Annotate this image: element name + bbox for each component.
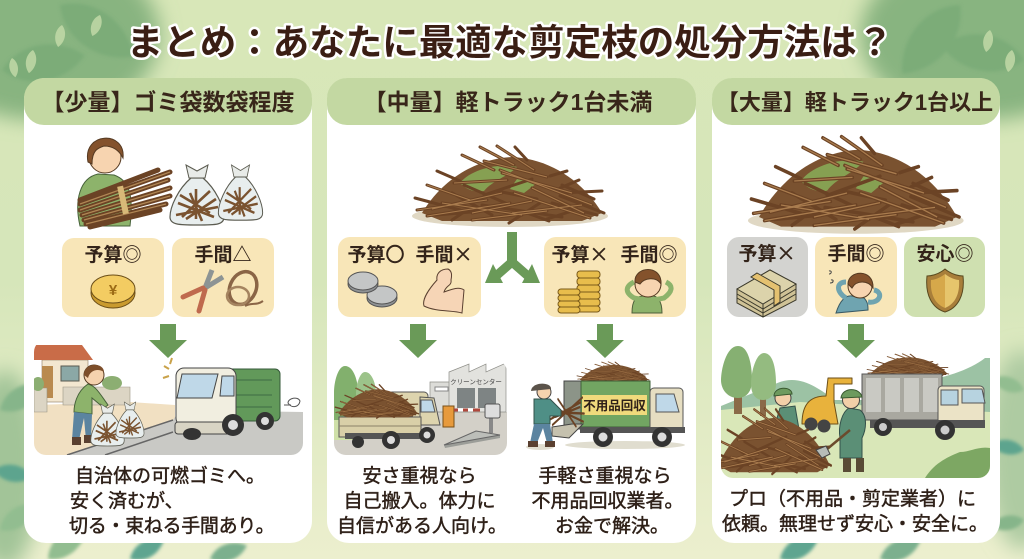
arrow down — [837, 324, 875, 358]
arrow down right — [586, 324, 624, 358]
sign: junk collection — [582, 395, 647, 415]
option: budget high, effort low: 手間◎ — [620, 244, 678, 266]
panel heading: medium amount — [327, 78, 696, 125]
arrow down left — [399, 324, 437, 358]
body text — [69, 465, 274, 537]
panel heading: medium amount: 【中量】軽トラック1台未満 — [364, 89, 652, 115]
body text right — [531, 465, 684, 537]
effort badge — [815, 237, 897, 317]
cost badge — [727, 237, 808, 317]
icon: silver coins — [348, 272, 397, 307]
title: まとめ：あなたに最適な剪定枝の処分方法は？ — [127, 22, 893, 63]
body text right: 手軽さ重視なら — [538, 465, 672, 487]
body text: 切る・束ねる手間あり。 — [69, 515, 274, 537]
body text: 自治体の可燃ゴミへ。 — [75, 465, 265, 487]
icon: relaxed person — [829, 271, 880, 313]
illustration: professional service scene — [714, 345, 990, 478]
body text left: 自信がある人向け。 — [337, 515, 507, 537]
illustration: large branch pile — [748, 137, 964, 234]
body text — [722, 488, 988, 535]
illustration: junk collection truck — [526, 362, 685, 450]
option: budget high, effort low: 予算× — [551, 240, 609, 267]
cost badge — [62, 238, 164, 317]
illustration: self haul to clean center — [334, 363, 507, 455]
illustration: branch pile — [412, 146, 608, 227]
sign: junk collection: 不用品回収 — [583, 399, 646, 413]
body text left: 安さ重視なら — [362, 465, 477, 487]
panel heading: large amount — [712, 78, 1000, 125]
panel heading: small amount — [24, 78, 312, 125]
effort badge — [172, 238, 274, 317]
illustration: self haul to clean center: クリーンセンター — [450, 377, 502, 386]
icon: banknote bundle — [737, 270, 796, 317]
body text: 安く済むが、 — [70, 490, 184, 512]
illustration: garbage collection scene — [32, 345, 303, 455]
body text: プロ（不用品・剪定業者）に — [729, 488, 976, 510]
split arrow — [485, 232, 540, 283]
icon: flexed arm — [424, 269, 464, 313]
body text right: お金で解決。 — [555, 515, 669, 537]
panel: small amount — [24, 78, 312, 543]
panel: medium amount — [327, 78, 696, 543]
panel: large amount — [712, 78, 1000, 543]
illustration: person with branches and bags — [78, 138, 263, 227]
cost badge: 予算× — [738, 239, 796, 266]
body text: 依頼。無理せず安心・安全に。 — [722, 513, 988, 535]
icon: relaxed person — [627, 270, 671, 313]
option: budget fair, effort high — [338, 237, 481, 317]
icon: gold coin stacks — [558, 271, 600, 313]
panel heading: large amount: 【大量】軽トラック1台以上 — [717, 90, 993, 115]
effort badge: 手間△ — [194, 244, 252, 266]
panel heading: small amount: 【少量】ゴミ袋数袋程度 — [42, 89, 294, 115]
body text left: 自己搬入。体力に — [343, 490, 496, 512]
icon: yen coin: ¥ — [109, 282, 118, 299]
body text left — [337, 465, 507, 537]
safety badge: 安心◎ — [916, 243, 974, 265]
option: budget fair, effort high: 手間× — [415, 240, 473, 267]
cost badge: 予算◎ — [84, 243, 142, 266]
effort badge: 手間◎ — [827, 243, 885, 265]
icon: gold shield — [927, 269, 963, 312]
arrow down — [149, 324, 187, 358]
safety badge — [904, 237, 985, 317]
option: budget fair, effort high: 予算〇 — [347, 240, 405, 267]
body text right: 不用品回収業者。 — [531, 490, 684, 512]
icon: pruning shears and rope — [183, 267, 263, 311]
option: budget high, effort low — [544, 237, 686, 317]
